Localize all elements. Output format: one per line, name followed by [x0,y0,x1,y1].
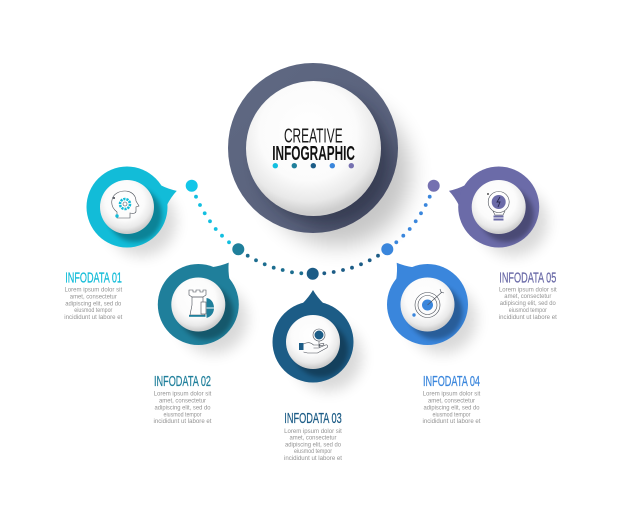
label block 1 [64,270,122,321]
label block 1: Lorem ipsum dolor sit [64,287,122,294]
label block 2: eiusmod tempor [164,411,202,418]
label block 5: incididunt ut labore et [499,314,557,321]
node 2: teal circle [158,256,247,354]
node 3: navy circle [272,290,362,391]
dotted arc connector [186,180,440,280]
title [272,126,355,168]
label block 5: eiusmod tempor [509,307,547,314]
label block 5 [499,269,557,321]
label block 3 [284,410,342,462]
title: CREATIVE [284,126,343,148]
label block 1: adipiscing elit, sed do [65,300,121,307]
label block 1: INFODATA 01 [65,270,122,287]
label block 1: eiusmod tempor [74,307,113,314]
label block 3: adipiscing elit, sed do [285,441,341,448]
title: INFOGRAPHIC [272,143,355,165]
node 5: purple circle [446,166,548,256]
label block 2: INFODATA 02 [154,373,211,390]
label block 2 [154,373,212,425]
icon: target with arrow [412,289,444,318]
label block 5: INFODATA 05 [499,269,556,286]
label block 3: incididunt ut labore et [284,455,342,462]
icon: hand holding flower [299,329,328,353]
node 4: blue circle [387,256,476,354]
label block 3: Lorem ipsum dolor sit [284,428,342,435]
label block 5: Lorem ipsum dolor sit [499,286,557,293]
node 1: cyan circle [86,166,180,256]
label block 2: amet, consectetur [159,398,207,405]
label block 5: amet, consectetur [504,293,552,300]
icon: chess rook and shield [189,290,214,318]
icon: head with gear [112,191,139,218]
label block 1: amet, consectetur [70,293,117,300]
label block 4: amet, consectetur [428,398,476,405]
label block 2: adipiscing elit, sed do [154,404,211,411]
label block 4: INFODATA 04 [423,373,480,390]
label block 1: incididunt ut labore et [64,314,122,321]
label block 4: eiusmod tempor [432,411,471,418]
label block 3: amet, consectetur [290,435,337,442]
label block 2: Lorem ipsum dolor sit [154,391,211,398]
label block 4: adipiscing elit, sed do [424,404,480,411]
label block 4 [422,373,481,425]
label block 2: incididunt ut labore et [154,418,212,425]
label block 5: adipiscing elit, sed do [500,300,556,307]
central circle [228,63,411,246]
icon: light bulb [487,192,509,220]
label block 3: eiusmod tempor [294,448,333,455]
label block 4: Lorem ipsum dolor sit [423,391,480,398]
label block 3: INFODATA 03 [284,410,342,427]
label block 4: incididunt ut labore et [422,418,481,425]
